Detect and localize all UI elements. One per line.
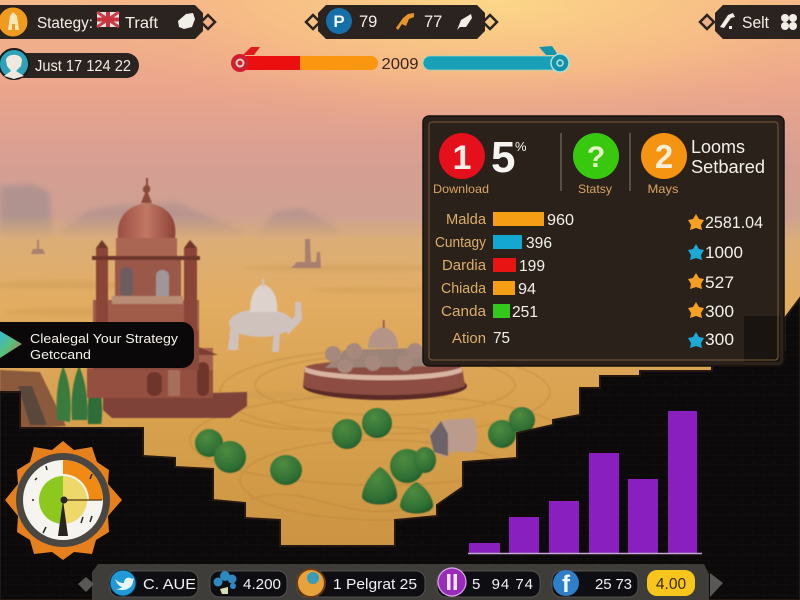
temple side towers	[96, 248, 108, 338]
ornament	[700, 15, 714, 29]
stars	[688, 214, 704, 348]
compass gauge	[5, 441, 122, 560]
star values: 527	[705, 273, 734, 292]
palace balustrade	[305, 367, 462, 380]
stone staircase rock	[0, 370, 66, 430]
gauge ticks	[32, 466, 92, 533]
bars	[469, 411, 697, 553]
callout text: Clealegal Your Strategy	[30, 331, 179, 346]
round domed palace	[303, 320, 467, 400]
temple middle storey	[93, 300, 199, 330]
sky background	[0, 0, 800, 245]
palace domes	[325, 320, 445, 373]
sand ground	[0, 215, 800, 600]
green half	[39, 476, 63, 524]
row labels: Chiada	[441, 280, 487, 297]
pill: yellow score	[647, 570, 695, 596]
pill: yellow score: 4.00	[656, 576, 686, 593]
temple plinth	[103, 392, 247, 418]
stat: maps: Mays	[648, 182, 678, 196]
looms heading: Looms	[691, 137, 745, 157]
orange bird icon	[396, 13, 414, 30]
avatar figure	[4, 55, 24, 79]
play icon	[0, 331, 22, 358]
star values: 2581.04	[705, 213, 763, 232]
palace platform	[303, 372, 467, 400]
icon glyph	[8, 12, 19, 30]
row values: 94	[518, 281, 536, 298]
bottom status bar	[78, 564, 723, 600]
fist icon	[178, 13, 195, 29]
flag icon	[97, 12, 119, 27]
stat: download	[433, 133, 489, 196]
red knob	[231, 54, 249, 72]
left ornament	[78, 577, 94, 592]
red flag	[243, 47, 260, 55]
pill: twitter	[110, 570, 198, 597]
looms heading	[691, 137, 765, 177]
row values: 75	[493, 330, 510, 347]
cypress trees	[57, 366, 102, 424]
stat: download: Download	[433, 182, 489, 196]
row labels	[435, 211, 487, 347]
star list	[688, 213, 763, 349]
pill: twitter: C. AUE	[143, 576, 196, 593]
pill: blue flowers: 4.200	[243, 576, 281, 593]
bar background	[92, 564, 709, 600]
pill: blue flowers	[210, 571, 287, 597]
stat: five percent	[491, 133, 527, 182]
teal knob centre	[557, 60, 563, 66]
stat: status: ?	[587, 141, 605, 174]
dome finial	[141, 178, 152, 203]
stat: five percent: 5	[491, 133, 515, 182]
stat: maps: 2	[655, 138, 673, 175]
palace wall	[303, 360, 465, 395]
bar background	[715, 5, 800, 39]
callout text	[30, 331, 179, 362]
temple upper storey	[115, 257, 181, 302]
avatar icon	[0, 7, 28, 37]
purple bar chart	[468, 411, 702, 554]
top right select bar	[700, 5, 800, 39]
pill: pelgrat	[297, 569, 425, 597]
stat: maps	[641, 133, 687, 196]
traft label: Traft	[125, 15, 159, 32]
pill: facebook	[552, 570, 638, 598]
pill: pause: 5 94 74	[472, 576, 533, 593]
temple cornice	[92, 240, 200, 260]
strategy callout	[0, 322, 194, 368]
row values: 960	[547, 212, 574, 229]
row labels: Cuntagy	[435, 234, 486, 251]
row values: 251	[512, 304, 538, 321]
select label: Selt	[742, 14, 769, 32]
clover icon	[781, 14, 797, 30]
bar background	[0, 5, 203, 39]
orange sector	[63, 460, 103, 500]
dark ring	[16, 453, 110, 547]
strategy label: Stategy:	[37, 15, 93, 32]
star values: 300	[705, 302, 734, 321]
dark brick foreground silhouette	[0, 298, 800, 600]
white camel statue	[228, 279, 302, 352]
stat: status: Statsy	[578, 182, 612, 196]
gauge needles	[58, 497, 102, 536]
main dome	[118, 203, 175, 238]
top left strategy bar	[0, 5, 215, 39]
row labels: Malda	[446, 211, 487, 228]
P coin	[326, 8, 352, 34]
left ornament	[306, 15, 320, 29]
stat: download: 1	[453, 139, 471, 177]
star values: 300	[705, 330, 734, 349]
row labels: Ation	[452, 330, 486, 347]
gauge star bezel	[5, 441, 122, 560]
value 77: 77	[424, 13, 442, 31]
distant mountains	[0, 184, 345, 236]
stat dividers	[561, 133, 630, 191]
P letter: P	[333, 12, 345, 31]
red bar	[246, 56, 300, 70]
progress meter	[231, 46, 569, 73]
axis	[468, 552, 702, 554]
date text: Just 17 124 22	[35, 58, 131, 75]
hut	[430, 418, 478, 458]
sand dune streaks	[0, 265, 440, 399]
row values: 396	[526, 235, 552, 252]
temple lower hall	[87, 368, 213, 398]
teal knob	[551, 54, 569, 72]
value 79: 79	[359, 13, 377, 31]
row values: 199	[519, 258, 545, 275]
player date pill	[0, 49, 139, 79]
looms heading: Setbared	[691, 157, 765, 177]
distant boats	[31, 239, 321, 268]
dark patch	[744, 316, 780, 362]
right ornament	[710, 573, 723, 597]
ornament	[201, 15, 215, 29]
callout text: Getccand	[30, 347, 91, 362]
avatar	[0, 49, 29, 79]
stat: five percent: %	[515, 139, 527, 154]
yellow half	[63, 476, 87, 524]
panel background	[423, 116, 784, 366]
red sandstone temple	[87, 178, 247, 418]
wrench icon	[720, 13, 735, 29]
red knob centre	[236, 60, 244, 66]
round green trees	[195, 407, 535, 514]
pill: pause	[437, 568, 540, 597]
pill	[10, 53, 139, 78]
year label: 2009	[382, 56, 418, 73]
temple collar	[116, 238, 177, 256]
pill: facebook: 25 73	[595, 576, 632, 593]
temple balcony	[112, 296, 183, 304]
top centre resources bar	[306, 5, 497, 39]
row labels: Canda	[441, 303, 487, 320]
stats panel	[423, 116, 784, 366]
teal bar	[423, 56, 556, 70]
pill: facebook: f	[562, 571, 571, 598]
bar background	[318, 5, 485, 39]
callout background	[0, 322, 194, 368]
right ornament	[483, 15, 497, 29]
row values	[493, 212, 574, 347]
pill: pelgrat: 1 Pelgrat 25	[333, 576, 417, 593]
teal flag	[539, 46, 558, 55]
row labels: Dardia	[442, 257, 487, 274]
star values: 1000	[705, 243, 743, 262]
stat: status	[573, 133, 619, 196]
panel inner border	[429, 122, 778, 360]
white face	[23, 460, 103, 540]
concentric sand swirls	[190, 350, 570, 520]
feather icon	[457, 14, 472, 30]
star values	[705, 213, 763, 349]
bar list	[435, 211, 574, 347]
row bars	[493, 212, 544, 318]
orange bar	[300, 56, 378, 70]
